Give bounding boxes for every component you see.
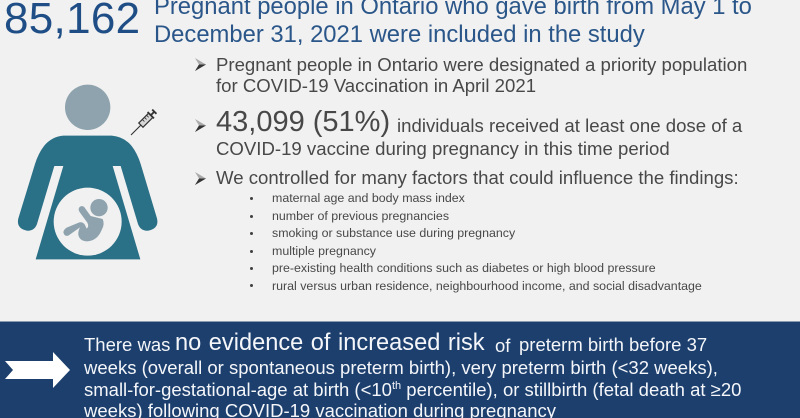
bullet: priority population [195,54,747,96]
headline description [154,0,752,48]
icon: white arrow [5,352,70,388]
conclusion text: preterm birth before 37 [519,334,707,355]
head [65,85,110,130]
factor items: multiple pregnancy [272,244,376,258]
conclusion text [84,330,741,418]
icon: pregnant person with fetus [18,84,158,260]
vaccination count first line: individuals received at least one dose of a [397,115,742,136]
factor items: maternal age and body mass index [272,191,465,205]
conclusion text: There was [84,334,170,355]
factor list [250,191,702,292]
belly circle [54,188,122,256]
fetus [63,199,108,241]
conclusion text: no evidence of increased risk [175,330,485,356]
headline description: December 31, 2021 were included in the study [154,21,645,48]
priority population text [216,54,747,96]
factor items: rural versus urban residence, neighbourhood income, and social disadvantage [272,278,702,292]
conclusion text: weeks (overall or spontaneous preterm birth), very preterm birth (<32 weeks), [84,357,718,378]
icon: syringe [130,108,157,136]
vaccination count second line: COVID-19 vaccine during pregnancy in this time period [216,138,670,159]
factor items [272,191,702,292]
arrow bullet [195,58,206,71]
conclusion text: small-for-gestational-age at birth (<10th percentile), or stillbirth (fetal death at ≥20 [84,379,741,400]
bullet: vaccination count [195,106,742,159]
arrow bullet [195,119,206,132]
vaccination count number: 43,099 (51%) [216,106,390,138]
conclusion text: of [495,335,510,356]
factor items: number of previous pregnancies [272,208,449,222]
arrow bullet [195,172,206,185]
controlled factors text: We controlled for many factors that could influence the findings: [216,167,739,188]
factor items: pre-existing health conditions such as diabetes or high blood pressure [272,261,656,275]
bullet: controlled factors [195,167,739,188]
conclusion banner [0,321,800,418]
priority population text: for COVID-19 Vaccination in April 2021 [216,75,536,96]
body [18,136,157,259]
factor items: smoking or substance use during pregnancy [272,226,515,240]
priority population text: Pregnant people in Ontario were designated a priority population [216,54,747,75]
